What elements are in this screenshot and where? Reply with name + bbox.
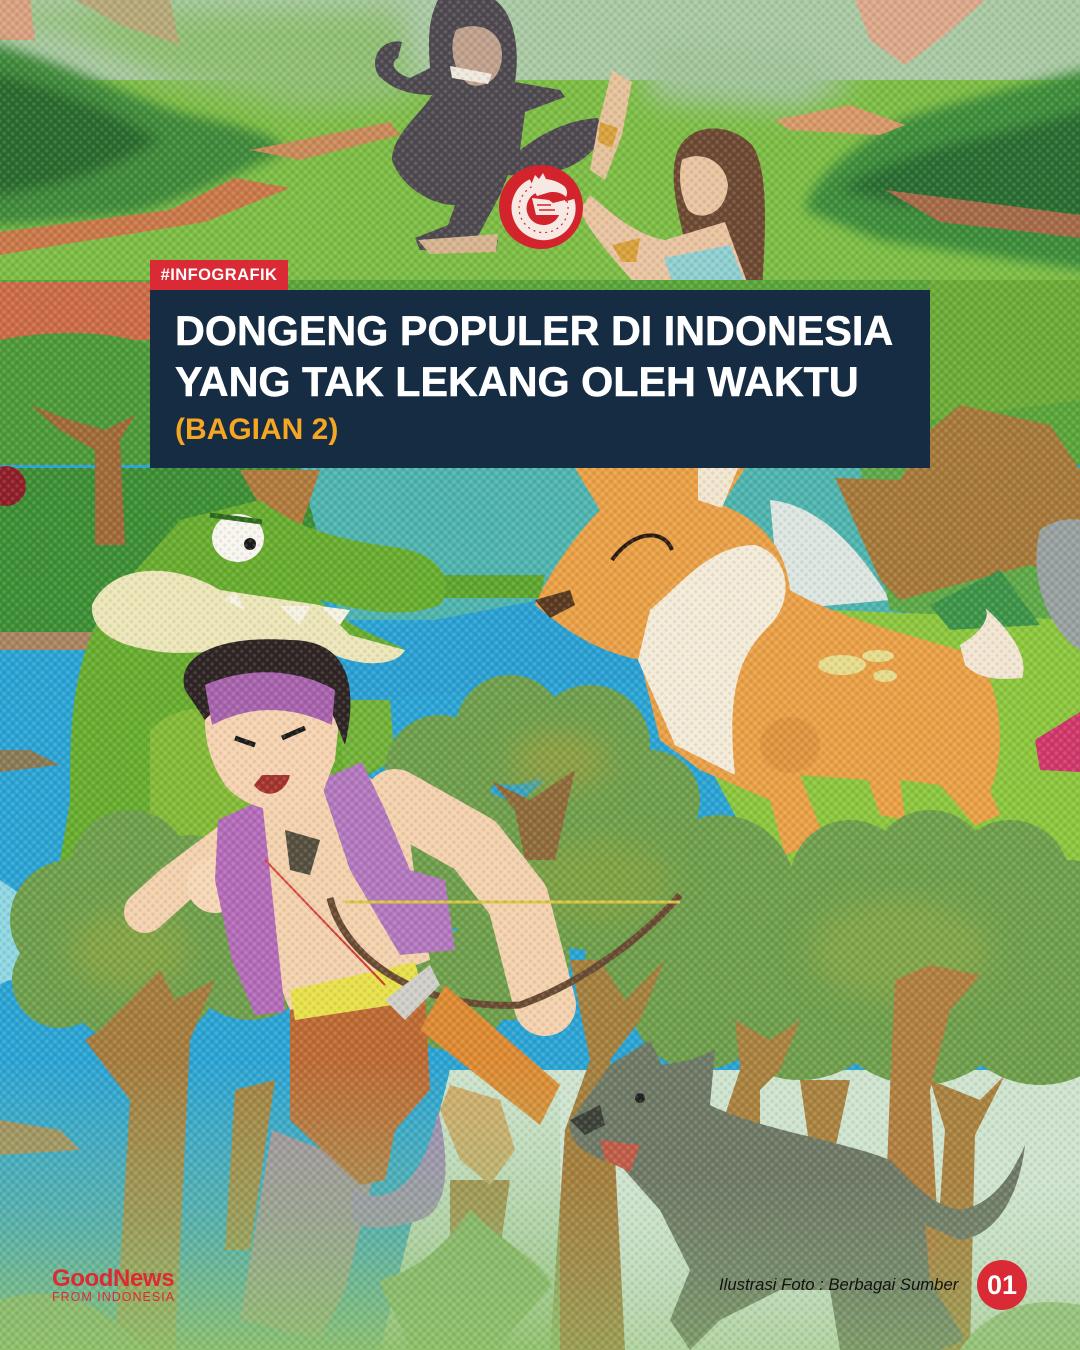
logo badge: red circle with eagle emblem xyxy=(499,165,583,249)
title text: YANG TAK LEKANG OLEH WAKTU xyxy=(175,359,859,405)
tag: #INFOGRAFIK: #INFOGRAFIK xyxy=(161,266,277,284)
trees: faded foreground xyxy=(0,1060,1080,1350)
background: top landscape xyxy=(0,0,1080,300)
subtitle: (BAGIAN 2) xyxy=(175,413,338,446)
character: girl xyxy=(580,70,765,290)
brand: GoodNews from Indonesia xyxy=(52,1265,175,1304)
character: crocodile xyxy=(51,500,446,990)
brand: GoodNews from Indonesia: GoodNews xyxy=(52,1265,174,1292)
tag: #INFOGRAFIK xyxy=(150,260,288,290)
character: boy with bow xyxy=(145,639,680,1340)
trees: middle and lower canopy xyxy=(10,675,1080,1350)
page number badge: 01 xyxy=(987,1270,1017,1300)
background: band behind the title xyxy=(0,280,1080,470)
character: monkey xyxy=(375,0,602,254)
title panel xyxy=(150,290,930,468)
character: black panther xyxy=(569,1040,1025,1350)
page number badge xyxy=(977,1260,1027,1310)
character: deer xyxy=(535,468,1024,855)
credit text: Ilustrasi Foto : Berbagai Sumber xyxy=(719,1275,958,1294)
title text: DONGENG POPULER DI INDONESIA xyxy=(175,308,893,354)
background: jungle, river and meadow xyxy=(0,405,1080,1350)
brand: GoodNews from Indonesia: FROM INDONESIA xyxy=(52,1290,175,1304)
title text xyxy=(175,308,893,405)
